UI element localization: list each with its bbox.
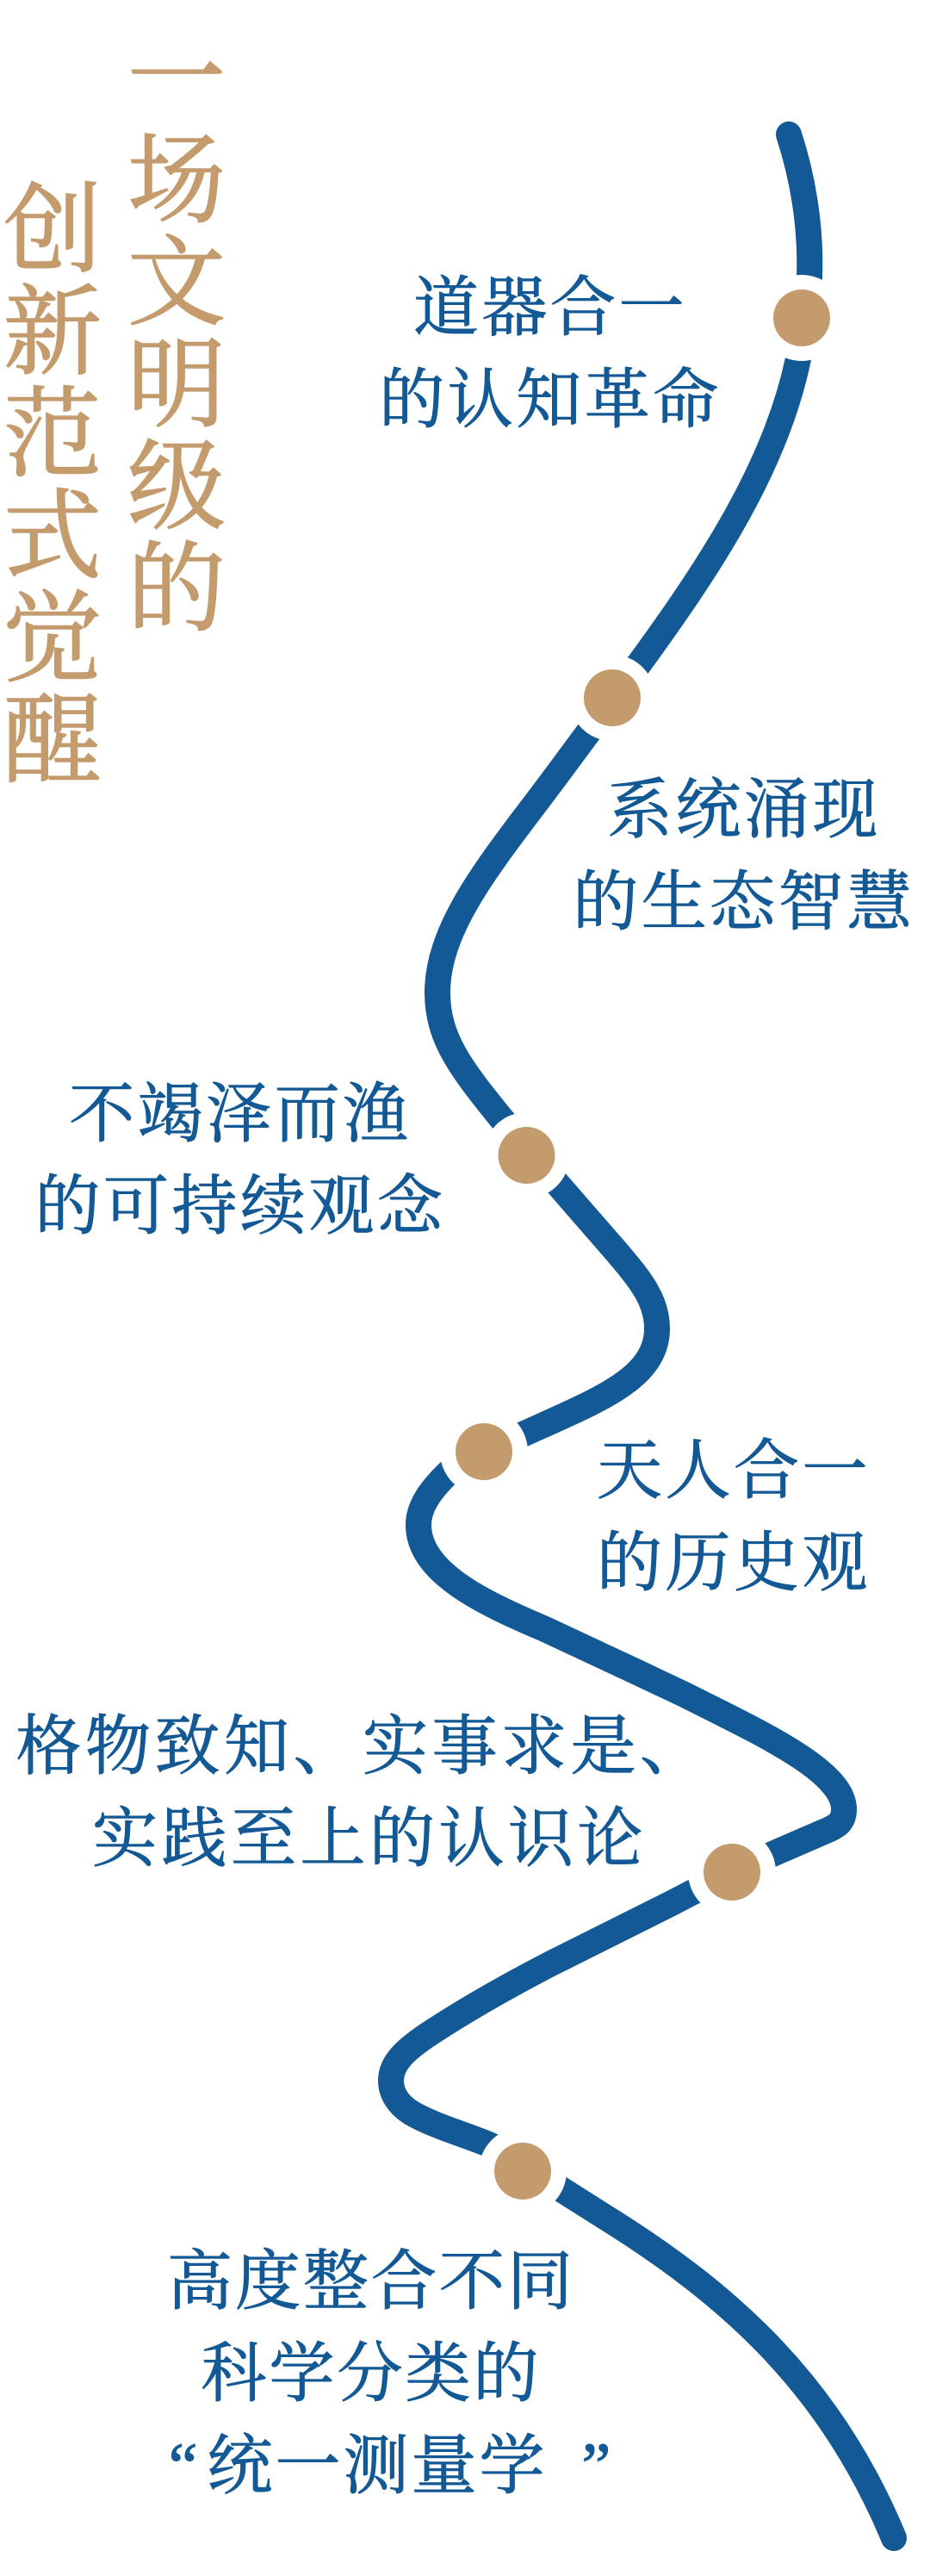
label: 统一测量学 [167,2246,613,2503]
label: 系统涌现 [573,775,915,939]
label: 不竭泽而渔 [34,1079,446,1243]
label: 天人合一: 天人合一 [597,1435,871,1508]
label: 不竭泽而渔: 的可持续观念 [34,1171,446,1243]
label: 道器合一: 道器合一 [413,272,687,345]
label: 统一测量学: 科学分类的 [202,2338,541,2411]
label: 道器合一: 的认知革命 [379,364,722,437]
dot 5 [688,1828,776,1916]
label: 格物致知 [16,1711,710,1876]
label: 不竭泽而渔: 不竭泽而渔 [69,1079,412,1151]
curve line [391,134,894,2538]
label: 格物致知: 实践至上的认识论 [92,1803,647,1876]
label: 统一测量学: 高度整合不同 [167,2246,575,2318]
label: 系统涌现: 系统涌现 [607,775,881,847]
label: 天人合一: 的历史观 [597,1528,871,1600]
dot 3 [484,1112,570,1198]
label: 道器合一 [379,272,722,437]
dot 6 [479,2127,567,2215]
label: 格物致知: 格物致知、实事求是、 [16,1711,710,1783]
dot 1 [759,275,845,361]
dot 4 [440,1408,528,1496]
title column 1: 一场文明级的 [113,26,222,638]
label: 系统涌现: 的生态智慧 [573,867,915,939]
label: 天人合一 [597,1435,871,1600]
dot 2 [569,655,655,741]
label: 统一测量学: “统一测量学 ” [169,2430,613,2503]
